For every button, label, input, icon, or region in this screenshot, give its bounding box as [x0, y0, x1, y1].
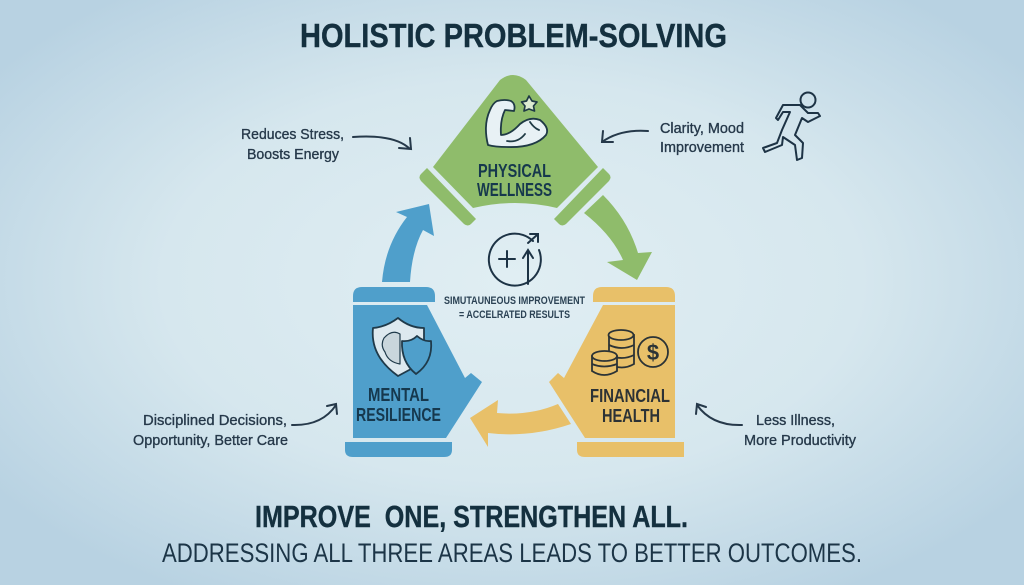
title: HOLISTIC PROBLEM-SOLVING [300, 17, 727, 54]
green pentagon [433, 75, 598, 208]
text: clarity, mood [660, 120, 745, 156]
arrow: yellow, financial to mental [470, 400, 571, 447]
physical wellness label: WELLNESS [477, 180, 552, 200]
arrow: to financial [696, 404, 742, 425]
physical wellness label: PHYSICAL [478, 161, 551, 181]
text: reduces stress [241, 126, 344, 163]
financial health label: FINANCIAL [590, 386, 670, 406]
arrow: to physical, left [353, 136, 411, 149]
mental resilience label [356, 385, 441, 425]
text: less illness [744, 412, 856, 449]
center caption: SIMUTAUNEOUS IMPROVEMENT [444, 295, 585, 307]
center caption [444, 295, 585, 321]
financial health label: HEALTH [602, 406, 660, 426]
icon: star [522, 96, 537, 111]
text: less illness: Less Illness, [756, 412, 835, 429]
panel: mental resilience [345, 287, 482, 457]
text: disciplined decisions [133, 412, 288, 449]
icon: flexed muscle arm [486, 100, 547, 147]
icon: runner [763, 92, 820, 160]
mental resilience label: MENTAL [368, 385, 429, 405]
panel: physical wellness [420, 75, 610, 226]
text: reduces stress: Boosts Energy [247, 146, 339, 163]
yellow top bar [593, 287, 675, 302]
text: clarity, mood: Clarity, Mood [660, 120, 744, 137]
icon: brain shield [373, 318, 431, 376]
text: less illness: More Productivity [744, 432, 856, 449]
panel: financial health [549, 287, 684, 457]
green right bracket [554, 168, 610, 226]
dollar sign: $ [647, 340, 659, 365]
green left bracket [420, 168, 476, 226]
arrow: blue, mental to physical [382, 204, 434, 282]
physical wellness label [477, 161, 552, 200]
icon: coins and dollar [592, 330, 668, 375]
blue body [353, 305, 482, 438]
mental resilience label: RESILIENCE [356, 405, 441, 425]
arrow: to physical, right [602, 131, 648, 142]
bottom subhead: ADDRESSING ALL THREE AREAS LEADS TO BETTER OUTCOMES. [162, 538, 862, 568]
bottom headline: IMPROVE ONE, STRENGTHEN ALL. [255, 499, 688, 534]
icon: plus and arrows circle [489, 234, 541, 286]
text: clarity, mood: Improvement [660, 139, 745, 156]
center caption: = ACCELRATED RESULTS [459, 309, 570, 321]
arrow: green, physical to financial [584, 195, 652, 280]
blue bottom bar [345, 442, 452, 457]
text: disciplined decisions: Opportunity, Better Care [133, 432, 288, 449]
yellow body [549, 305, 675, 438]
yellow bottom bar [577, 442, 684, 457]
arrow: to mental [292, 404, 337, 425]
blue top bar [353, 287, 435, 302]
text: disciplined decisions: Disciplined Decisions, [143, 412, 287, 429]
text: reduces stress: Reduces Stress, [241, 126, 344, 143]
financial health label [590, 386, 670, 426]
